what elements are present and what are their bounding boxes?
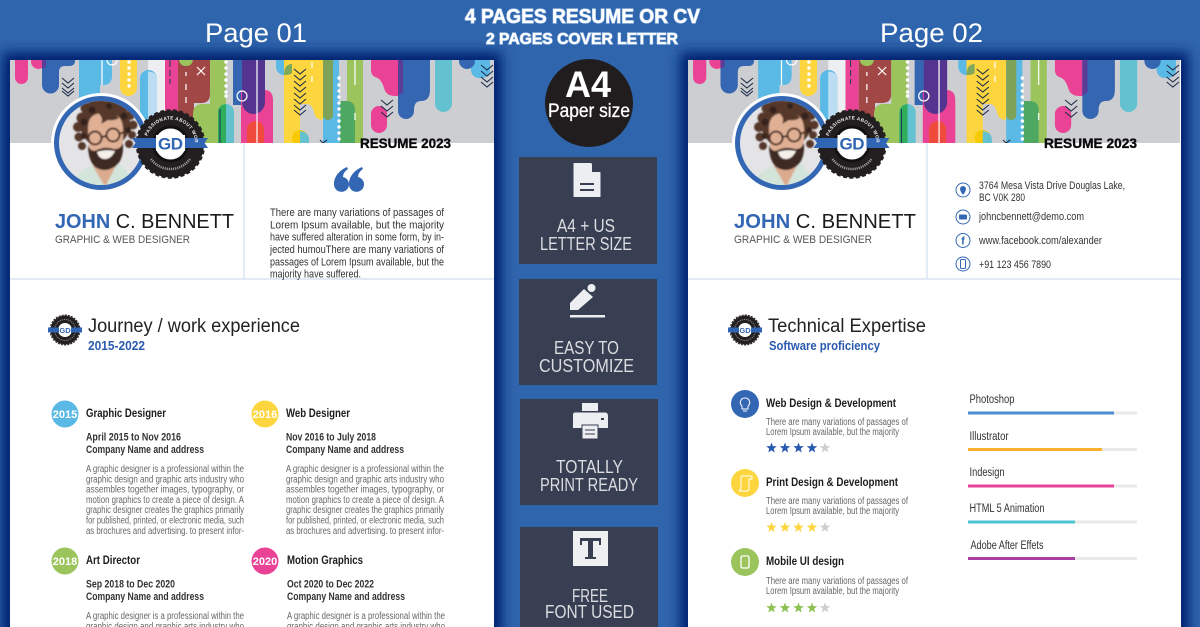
skill: print design: Print Design & Development: [766, 477, 898, 489]
card: easy to customize: CUSTOMIZE: [539, 356, 634, 376]
contact: facebook: f: [961, 236, 965, 248]
section heading: technical expertise: Software proficiency: [769, 338, 881, 353]
job: motion graphics 2020: 2020: [253, 556, 277, 568]
logo badge: PASSIONATE ABOUT WORK: [826, 116, 880, 143]
job: art director 2018: Sep 2018 to Dec 2020: [86, 578, 175, 590]
role: GRAPHIC & WEB DESIGNER: [734, 234, 872, 246]
badge: A4 paper size: A4: [565, 64, 611, 105]
contact: email: [956, 210, 1084, 224]
contact: address: BC V0K 280: [979, 192, 1025, 204]
card: easy to customize: [519, 279, 657, 385]
job: art director 2018: [52, 548, 244, 627]
skill: print design: Lorem Ipsum available, but the majority: [766, 506, 899, 517]
job: graphic designer 2015: [52, 400, 245, 537]
job: web designer 2016: for published, printed, or electronic media, such: [286, 516, 444, 526]
heading: page 02: Page 02: [880, 18, 983, 48]
skill: mobile UI: There are many variations of passages of: [766, 576, 908, 587]
quote text block: jected humouThere are many variations of: [269, 244, 445, 256]
section heading: technical expertise: Technical Expertise: [768, 316, 926, 337]
logo badge: [132, 109, 208, 179]
skill: mobile UI: [731, 548, 908, 612]
bar chart: software proficiency: [968, 394, 1137, 560]
section heading: journey: 2015-2022: [88, 338, 145, 353]
page shadow: page 01: [2, 52, 502, 627]
job: web designer 2016: assembles together images, typography, or: [286, 485, 445, 496]
bar chart: software proficiency: Indesign: [970, 467, 1004, 479]
card: A4 + US letter size: LETTER SIZE: [540, 234, 632, 254]
job: graphic designer 2015: Graphic Designer: [86, 408, 166, 420]
contact: address: [956, 180, 1125, 204]
section heading: technical expertise: [728, 315, 926, 353]
quote text block: passages of Lorem Ipsum available, but the: [270, 256, 444, 268]
heading: page 01: Page 01: [205, 18, 307, 48]
section heading: technical expertise: GD: [739, 326, 751, 335]
name: JOHN C. BENNETT: [55, 211, 234, 233]
job: motion graphics 2020: [252, 548, 445, 627]
logo badge: GD: [840, 134, 864, 154]
skill: web design: There are many variations of passages of: [766, 417, 908, 428]
job: web designer 2016: 2016: [253, 409, 277, 421]
title: 4 PAGES RESUME OR CV: [465, 6, 701, 28]
resume label: RESUME 2023: [1044, 135, 1137, 151]
job: graphic designer 2015: for published, printed, or electronic media, such: [86, 516, 244, 526]
logo badge: GD: [158, 134, 183, 154]
job: graphic designer 2015: 2015: [53, 409, 77, 421]
job: web designer 2016: motion graphics to create a piece of design. A: [286, 495, 444, 506]
job: graphic designer 2015: assembles together images, typography, or: [86, 485, 245, 496]
panel: resume page 02: [688, 60, 1181, 627]
skill: mobile UI: Lorem Ipsum available, but the majority: [766, 586, 899, 597]
job: motion graphics 2020: A graphic designer is a professional within the: [287, 611, 445, 622]
quote mark icon: [334, 167, 364, 192]
card: A4 + US letter size: A4 + US: [557, 216, 615, 236]
job: graphic designer 2015: A graphic designer is a professional within the: [86, 464, 244, 475]
job: graphic designer 2015: graphic designer creates the graphics primarily: [86, 505, 244, 516]
quote text block: Lorem Ipsum available, but the majority: [270, 219, 445, 231]
role: GRAPHIC & WEB DESIGNER: [55, 234, 190, 246]
bar chart: software proficiency: Illustrator: [970, 431, 1009, 443]
job: art director 2018: Company Name and address: [86, 591, 204, 603]
job: web designer 2016: Web Designer: [286, 408, 350, 420]
job: web designer 2016: [252, 400, 445, 537]
job: web designer 2016: A graphic designer is a professional within the: [286, 464, 444, 475]
job: web designer 2016: Nov 2016 to July 2018: [286, 432, 376, 444]
card: totally print ready: [520, 399, 658, 505]
card: totally print ready: TOTALLY: [556, 457, 623, 477]
card: easy to customize: EASY TO: [554, 338, 619, 358]
page shadow: page 02: [680, 52, 1189, 627]
header art banner: [688, 50, 1180, 161]
quote text block: There are many variations of passages of: [270, 207, 445, 219]
portrait photo: [732, 93, 832, 200]
skill: print design: There are many variations of passages of: [766, 496, 908, 507]
bar chart: software proficiency: HTML 5 Animation: [970, 503, 1044, 515]
contact: address: 3764 Mesa Vista Drive Douglas Lake,: [979, 180, 1125, 192]
skill: web design: Lorem Ipsum available, but the majority: [766, 427, 899, 438]
name: JOHN C. BENNETT: [734, 211, 916, 233]
section heading: journey: Journey / work experience: [88, 316, 300, 337]
job: graphic designer 2015: motion graphics to create a piece of design. A: [86, 495, 244, 506]
card: free font used: FREE: [572, 586, 608, 606]
bar chart: software proficiency: Adobe After Effets: [970, 540, 1044, 552]
job: web designer 2016: Company Name and address: [286, 444, 404, 456]
title: [465, 6, 701, 48]
panel: resume page 01: [10, 60, 494, 627]
contact: facebook: [956, 234, 1102, 248]
card: free font used: [520, 527, 658, 627]
badge: A4 paper size: [545, 59, 633, 147]
job: web designer 2016: as brochures and advertising. to present infor-: [286, 526, 444, 537]
job: graphic designer 2015: Company Name and address: [86, 444, 204, 456]
job: motion graphics 2020: Motion Graphics: [287, 555, 363, 567]
section heading: journey: GD: [59, 326, 71, 335]
job: motion graphics 2020: Oct 2020 to Dec 2022: [287, 578, 374, 590]
job: art director 2018: 2018: [53, 556, 77, 568]
job: art director 2018: Art Director: [86, 555, 140, 567]
job: graphic designer 2015: graphic design and graphic arts industry who: [86, 474, 244, 485]
card: A4 + US letter size: [519, 157, 657, 264]
skill: web design: Web Design & Development: [766, 398, 896, 410]
contact: phone: [956, 257, 1051, 271]
title: 2 PAGES COVER LETTER: [486, 31, 678, 48]
skill: web design: [731, 390, 908, 452]
logo badge: [814, 109, 890, 179]
skill: print design: [731, 469, 908, 532]
job: graphic designer 2015: as brochures and advertising. to present infor-: [86, 526, 244, 537]
card: free font used: FONT USED: [545, 602, 634, 622]
job: art director 2018: A graphic designer is a professional within the: [86, 611, 244, 622]
portrait photo: [51, 93, 151, 200]
skill: mobile UI: Mobile UI design: [766, 556, 844, 568]
card: totally print ready: PRINT READY: [540, 475, 638, 495]
quote text block: have suffered alteration in some form, by in-: [270, 232, 444, 244]
section heading: journey: [48, 315, 300, 353]
resume label: RESUME 2023: [360, 135, 451, 151]
job: web designer 2016: graphic designer creates the graphics primarily: [286, 505, 444, 516]
contact: facebook: www.facebook.com/alexander: [978, 235, 1102, 247]
contact: phone: +91 123 456 7890: [979, 259, 1051, 271]
panel: feature column: [519, 59, 658, 627]
bar chart: software proficiency: Photoshop: [970, 394, 1014, 406]
badge: A4 paper size: Paper size: [548, 101, 630, 122]
quote text block: [269, 207, 445, 281]
job: web designer 2016: graphic design and graphic arts industry who: [286, 474, 444, 485]
quote text block: majority have suffered.: [270, 269, 361, 281]
contact: email: johncbennett@demo.com: [978, 211, 1084, 223]
header art banner: [10, 50, 494, 161]
job: graphic designer 2015: April 2015 to Nov 2016: [86, 432, 181, 444]
job: motion graphics 2020: Company Name and address: [287, 591, 405, 603]
